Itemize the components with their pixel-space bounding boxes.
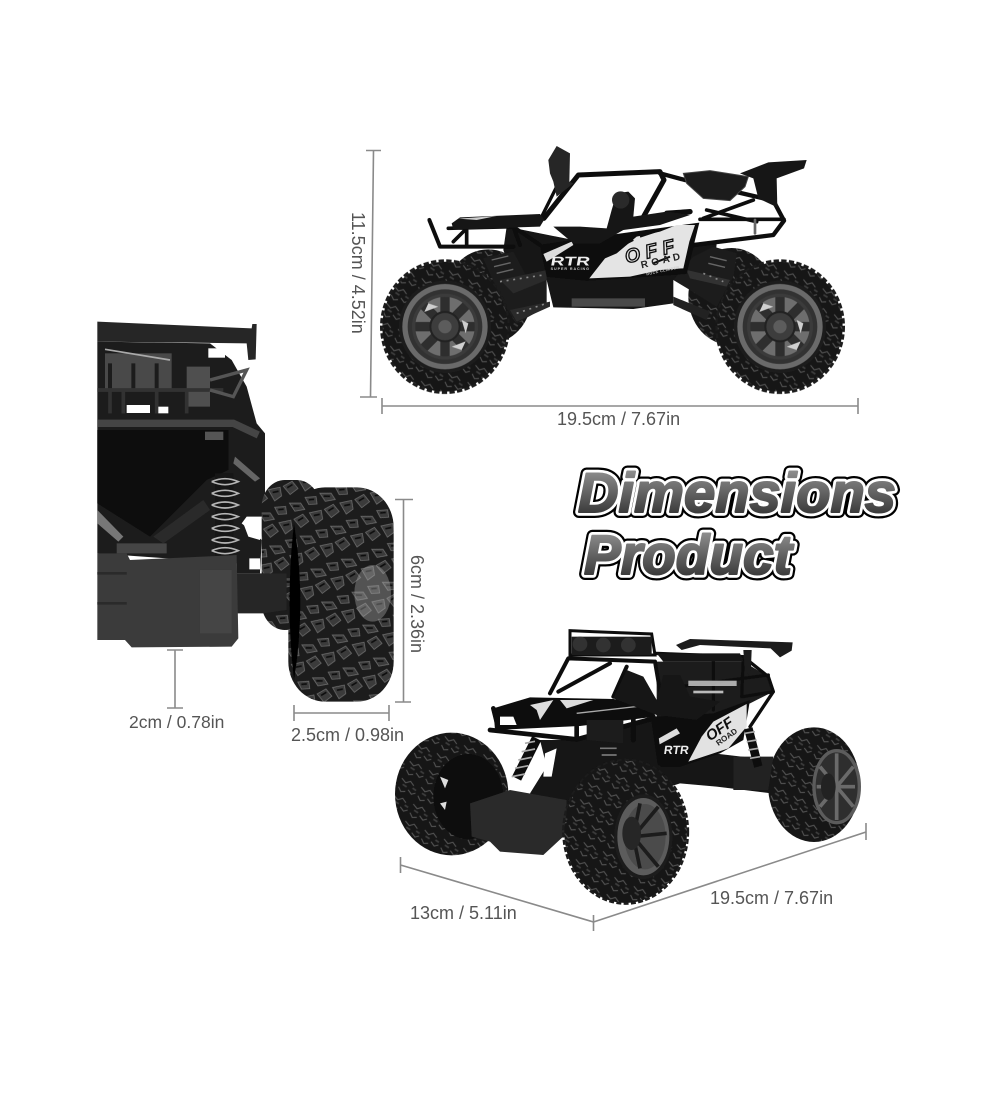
rear cage body [657,662,773,717]
dimension: width 13cm: 13cm / 5.11in [410,903,517,923]
hood [493,697,655,730]
front wheel [563,760,688,904]
roof light bar [570,631,655,655]
rear spoiler [740,160,807,207]
rear inner tyre [262,480,320,630]
body side panel: SUPER RACING [551,267,589,271]
body side panel: ROAD [640,252,681,271]
product photo: rear close-up [97,322,394,702]
left wheel [395,733,508,855]
body side panel: RTR [549,254,591,269]
front battery block [470,790,567,855]
body side panel [540,223,699,281]
body side panel: OFF [623,236,678,268]
title: Dimensions Product: Dimensions [578,461,896,524]
inner wheels [445,248,775,345]
rear spoiler [97,322,257,360]
interior and driver [553,191,690,243]
dimension: length 19.5cm [382,398,858,429]
dimension: length 19.5cm: 19.5cm / 7.67in [557,409,680,429]
body and panel: ROAD [714,726,739,748]
chassis [530,717,773,820]
white gaps [243,523,260,569]
roll cage and frame [429,172,784,247]
front shocks [512,728,760,778]
hood [452,214,544,229]
chassis cavity [97,430,260,553]
title: Dimensions Product [578,461,896,586]
far right wheel [768,727,860,842]
dimension: length 19.5cm, angled: 19.5cm / 7.67in [710,888,833,908]
body and panel: RTR [663,743,690,757]
chassis and suspension [483,227,737,323]
product photo: three-quarter view of truck [395,631,860,904]
front bumper and frame [490,653,773,763]
roof and spoiler [657,639,793,675]
rear wheel [716,261,844,393]
body side panel: ROCK CLIMBER [646,265,680,276]
front wheel [381,261,509,393]
gearbox housing [97,553,238,647]
product photo: side view of truck [381,146,844,393]
body and panel: OFF [703,714,738,745]
main tyre [288,487,394,702]
title: Dimensions Product: Product [584,523,794,586]
dimension: tyre height 6cm [395,500,427,702]
shock spring [212,473,238,557]
body and panel [653,700,750,767]
hood highlight [458,216,497,220]
interior and driver [587,670,737,743]
dimension: width 13cm [400,857,594,923]
dimension: height 11.5cm [348,150,381,397]
dimension: tyre width 2.5cm: 2.5cm / 0.98in [291,725,404,745]
dimension: height 11.5cm: 11.5cm / 4.52in [348,212,368,334]
dimension: tyre height 6cm: 6cm / 2.36in [407,555,427,653]
dimension: clearance 2cm [129,650,224,732]
dimension: clearance 2cm: 2cm / 0.78in [129,712,224,732]
title: Dimensions Product: Product [584,523,794,586]
body upper rear [97,342,265,573]
title: Dimensions Product: Dimensions [578,461,896,524]
snorkel mirror [548,146,573,197]
axle [237,573,287,613]
title: Dimensions Product: Dimensions [578,461,896,524]
dimension: tyre width 2.5cm [291,705,404,745]
spare tyre [683,171,748,201]
dimension: length 19.5cm, angled [594,823,866,931]
title: Dimensions Product: Product [584,523,794,586]
